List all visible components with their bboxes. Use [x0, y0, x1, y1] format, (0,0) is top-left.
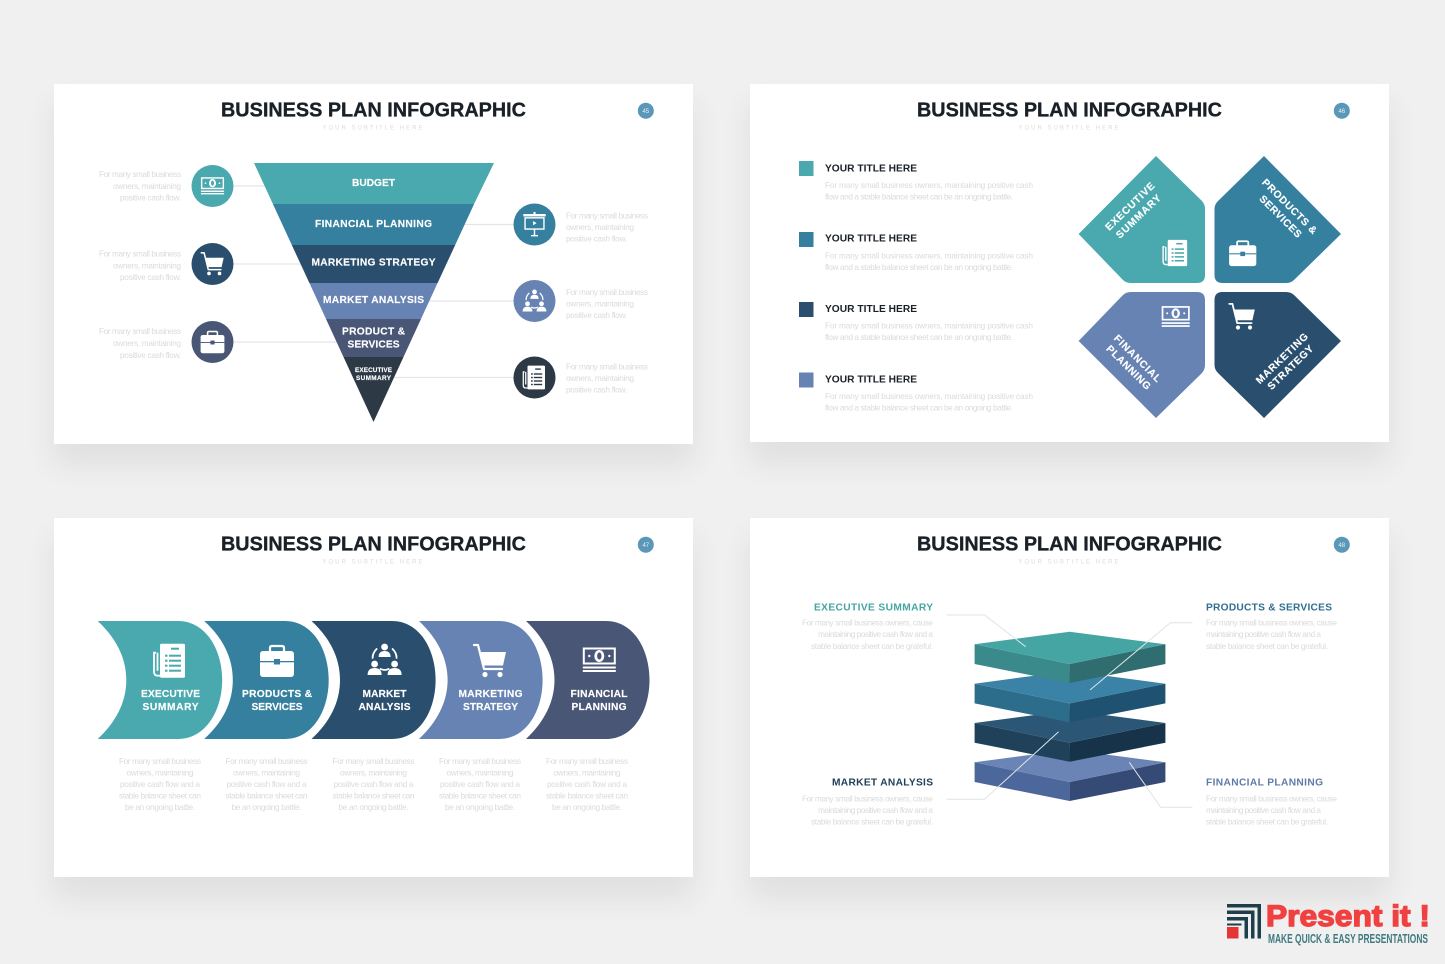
chevron: market analysis: MARKET	[362, 689, 407, 700]
text block: column four: stable balance sheet can	[439, 790, 521, 800]
subtitle: YOUR SUBTITLE HERE	[322, 126, 422, 132]
text block: column four	[439, 756, 521, 812]
text block: column one: owners, maintaining	[126, 768, 194, 778]
funnel layer: budget	[254, 163, 494, 204]
funnel layer: executive summary: SUMMARY	[356, 375, 392, 382]
funnel layer: executive summary	[344, 357, 404, 422]
subtitle: YOUR SUBTITLE HERE	[1018, 560, 1118, 566]
layer: financial planning	[975, 750, 1165, 801]
inverted funnel chart	[254, 163, 494, 422]
text block: right one: For many small business	[566, 210, 648, 220]
panel: funnel slide	[54, 84, 693, 444]
icon: cash circle	[192, 165, 234, 207]
text block: column four: positive cash flow and a	[440, 779, 520, 789]
panel: layered stack slide	[750, 518, 1389, 877]
text block: right one: owners, maintaining	[566, 222, 634, 232]
text block: column five: stable balance sheet can	[546, 790, 628, 800]
text block: financial planning: stable balance sheet can be grateful.	[1206, 816, 1328, 826]
chevron: marketing strategy: STRATEGY	[463, 702, 518, 713]
text block: market analysis	[802, 777, 933, 826]
page number	[638, 103, 654, 119]
text block: left three	[99, 326, 181, 360]
text block: column five: owners, maintaining	[554, 768, 621, 778]
text block: financial planning: maintaining positive cash flow and a	[1206, 805, 1321, 815]
text block: column three: owners, maintaining	[340, 768, 407, 778]
text block: column five: positive cash flow and a	[547, 779, 627, 789]
text block: column two: For many small business	[226, 756, 308, 766]
text block: left two: owners, maintaining	[113, 260, 181, 270]
chevron: financial planning: FINANCIAL	[570, 689, 628, 700]
text block: right two: positive cash flow.	[566, 310, 627, 320]
petal: marketing strategy	[1214, 292, 1341, 418]
list item one: For many small business owners, maintaining positive cash	[825, 180, 1033, 190]
icon: people circle	[514, 280, 556, 322]
text block: left two	[99, 248, 181, 282]
logo wordmark: Present it !	[1266, 900, 1430, 933]
chevron: marketing strategy	[419, 621, 543, 739]
text block: right three: owners, maintaining	[566, 373, 634, 383]
chevron: products and services	[204, 621, 329, 739]
title: BUSINESS PLAN INFOGRAPHIC	[221, 532, 526, 555]
leader line: executive summary	[946, 615, 1026, 647]
text block: column three: stable balance sheet can	[332, 790, 415, 800]
petal: products and services: PRODUCTS &	[1259, 177, 1319, 237]
list item four: flow and a stable balance sheet can be an ongoing battle.	[825, 402, 1013, 412]
funnel layer: executive summary: EXECUTIVE	[355, 367, 393, 374]
leader line: market analysis	[946, 732, 1059, 799]
icon: document circle	[514, 356, 556, 398]
icon: cart circle	[192, 243, 234, 285]
page number	[1334, 103, 1350, 119]
text block: column three: For many small business	[332, 756, 414, 766]
list item two: For many small business owners, maintaining positive cash	[825, 250, 1033, 260]
text block: column four: be an ongoing battle.	[445, 802, 515, 812]
petal: products and services: SERVICES	[1257, 194, 1303, 241]
list item four	[799, 372, 1033, 412]
list item two: flow and a stable balance sheet can be an ongoing battle.	[825, 262, 1013, 272]
chevron: products and services: PRODUCTS &	[242, 689, 313, 700]
text block: column two: be an ongoing battle.	[232, 802, 302, 812]
funnel layer: product and services: SERVICES	[348, 340, 400, 350]
icon: briefcase circle	[192, 321, 234, 363]
petal: financial planning	[1079, 292, 1205, 418]
list item three: YOUR TITLE HERE	[825, 304, 917, 315]
chevron: products and services: SERVICES	[252, 702, 303, 713]
text block: column two	[226, 756, 308, 812]
text block: left one: For many small business	[99, 169, 181, 179]
text block: left one	[99, 169, 181, 202]
list item four: For many small business owners, maintaining positive cash	[825, 391, 1033, 401]
text block: left three: For many small business	[99, 326, 181, 336]
text block: market analysis: maintaining positive cash flow and a	[818, 805, 933, 815]
text block: column one: stable balance sheet can	[119, 790, 201, 800]
funnel layer: marketing strategy: MARKETING STRATEGY	[312, 258, 436, 269]
panel: chevron process slide	[54, 518, 693, 877]
text block: column one	[119, 756, 201, 812]
text block: market analysis: stable balance sheet can be grateful.	[811, 816, 933, 826]
text block: products and services: stable balance sheet can be grateful.	[1206, 641, 1328, 651]
text block: financial planning	[1206, 777, 1337, 826]
text block: column one: positive cash flow and a	[120, 779, 200, 789]
petal: financial planning: FINANCIAL	[1111, 333, 1163, 385]
text block: right three	[566, 362, 648, 394]
logo: Present it	[1227, 900, 1430, 946]
text block: products and services: maintaining positive cash flow and a	[1206, 629, 1321, 639]
text block: column three: positive cash flow and a	[334, 779, 414, 789]
text block: products and services	[1206, 602, 1337, 651]
petal: executive summary: EXECUTIVE	[1104, 181, 1158, 233]
text block: executive summary: For many small business owners, cause	[802, 618, 933, 628]
text block: executive summary: stable balance sheet can be grateful.	[811, 641, 933, 651]
text block: column four: For many small business	[439, 756, 521, 766]
petal: financial planning: PLANNING	[1104, 344, 1152, 393]
text block: left one: positive cash flow.	[120, 192, 181, 202]
text block: right three: For many small business	[566, 362, 648, 372]
petal: executive summary: SUMMARY	[1114, 193, 1164, 241]
funnel layer: product and services: PRODUCT &	[342, 326, 406, 338]
petal: marketing strategy: STRATEGY	[1266, 343, 1316, 393]
text block: executive summary: EXECUTIVE SUMMARY	[814, 602, 933, 613]
leader line: products and services	[1090, 623, 1192, 690]
text block: executive summary	[802, 602, 933, 651]
layer stack chart	[975, 632, 1165, 801]
page number: 46	[1338, 109, 1346, 115]
text block: financial planning: FINANCIAL PLANNING	[1206, 777, 1323, 788]
text block: left three: owners, maintaining	[113, 338, 181, 348]
list item three: For many small business owners, maintaining positive cash	[825, 320, 1033, 330]
list item two: YOUR TITLE HERE	[825, 234, 917, 245]
text block: right two: owners, maintaining	[566, 298, 634, 308]
chevron: financial planning: PLANNING	[572, 702, 627, 713]
funnel layer: product and services	[326, 319, 421, 357]
icon: presentation circle	[514, 204, 556, 246]
text block: column three	[332, 756, 415, 812]
funnel layer: market analysis	[309, 283, 438, 319]
list item three	[799, 302, 1033, 342]
text block: column four: owners, maintaining	[446, 768, 514, 778]
text block: left one: owners, maintaining	[113, 181, 181, 191]
layer: products and services	[975, 671, 1165, 722]
text block: column one: be an ongoing battle.	[125, 802, 195, 812]
text block: left two: For many small business	[99, 248, 181, 258]
page number	[638, 537, 654, 553]
text block: products and services: PRODUCTS & SERVICES	[1206, 602, 1332, 613]
title: BUSINESS PLAN INFOGRAPHIC	[221, 98, 526, 121]
text block: column two: stable balance sheet can	[226, 790, 308, 800]
layer: executive summary	[975, 632, 1165, 683]
funnel layer: financial planning	[273, 204, 474, 245]
text block: market analysis: For many small business owners, cause	[802, 794, 933, 804]
text block: financial planning: For many small business owners, cause	[1206, 794, 1337, 804]
text block: right one	[566, 210, 648, 244]
leader line: financial planning	[1129, 762, 1192, 807]
chevron: marketing strategy: MARKETING	[458, 689, 523, 700]
funnel layer: market analysis: MARKET ANALYSIS	[323, 295, 424, 306]
funnel layer: financial planning: FINANCIAL PLANNING	[315, 219, 432, 230]
text block: left two: positive cash flow.	[120, 272, 181, 282]
text block: right three: positive cash flow.	[566, 384, 627, 394]
chevron: executive summary	[98, 621, 222, 739]
petal: products and services	[1214, 156, 1341, 283]
page number: 45	[642, 109, 650, 115]
text block: column five	[546, 756, 628, 812]
panel: petal slide	[750, 84, 1389, 442]
text block: right two	[566, 287, 648, 320]
funnel layer: budget: BUDGET	[352, 178, 396, 189]
text block: market analysis: MARKET ANALYSIS	[832, 777, 933, 788]
subtitle: YOUR SUBTITLE HERE	[322, 560, 422, 566]
text block: right one: positive cash flow.	[566, 234, 627, 244]
text block: column five: For many small business	[546, 756, 628, 766]
text block: right two: For many small business	[566, 287, 648, 297]
logo mark	[1227, 904, 1261, 938]
text block: column one: For many small business	[119, 756, 201, 766]
subtitle: YOUR SUBTITLE HERE	[1018, 126, 1118, 132]
list item one: YOUR TITLE HERE	[825, 164, 917, 174]
page number: 48	[1338, 543, 1346, 549]
list item one	[799, 161, 1033, 202]
list item four: YOUR TITLE HERE	[825, 375, 917, 386]
list item one: flow and a stable balance sheet can be an ongoing battle.	[825, 192, 1013, 202]
page number: 47	[642, 543, 650, 549]
chevron: financial planning	[526, 621, 650, 739]
chevron: executive summary: EXECUTIVE	[141, 689, 200, 700]
chevron: executive summary: SUMMARY	[142, 702, 199, 713]
text block: column two: positive cash flow and a	[226, 779, 307, 789]
text block: executive summary: maintaining positive cash flow and a	[818, 629, 933, 639]
funnel layer: marketing strategy	[292, 245, 455, 283]
text block: column three: be an ongoing battle.	[338, 802, 408, 812]
text block: products and services: For many small business owners, cause	[1206, 618, 1337, 628]
title: BUSINESS PLAN INFOGRAPHIC	[917, 532, 1222, 555]
text block: left three: positive cash flow.	[120, 350, 181, 360]
text block: column two: owners, maintaining	[233, 768, 300, 778]
text block: column five: be an ongoing battle.	[552, 802, 622, 812]
chevron: market analysis: ANALYSIS	[358, 702, 411, 713]
petal: executive summary	[1079, 156, 1205, 283]
chevron: market analysis	[312, 621, 436, 739]
list item two	[799, 232, 1033, 272]
title: BUSINESS PLAN INFOGRAPHIC	[917, 98, 1222, 121]
list item three: flow and a stable balance sheet can be an ongoing battle.	[825, 332, 1013, 342]
petal: marketing strategy: MARKETING	[1254, 331, 1311, 387]
page number	[1334, 537, 1350, 553]
connector lines	[234, 186, 514, 378]
layer: market analysis	[975, 710, 1165, 762]
